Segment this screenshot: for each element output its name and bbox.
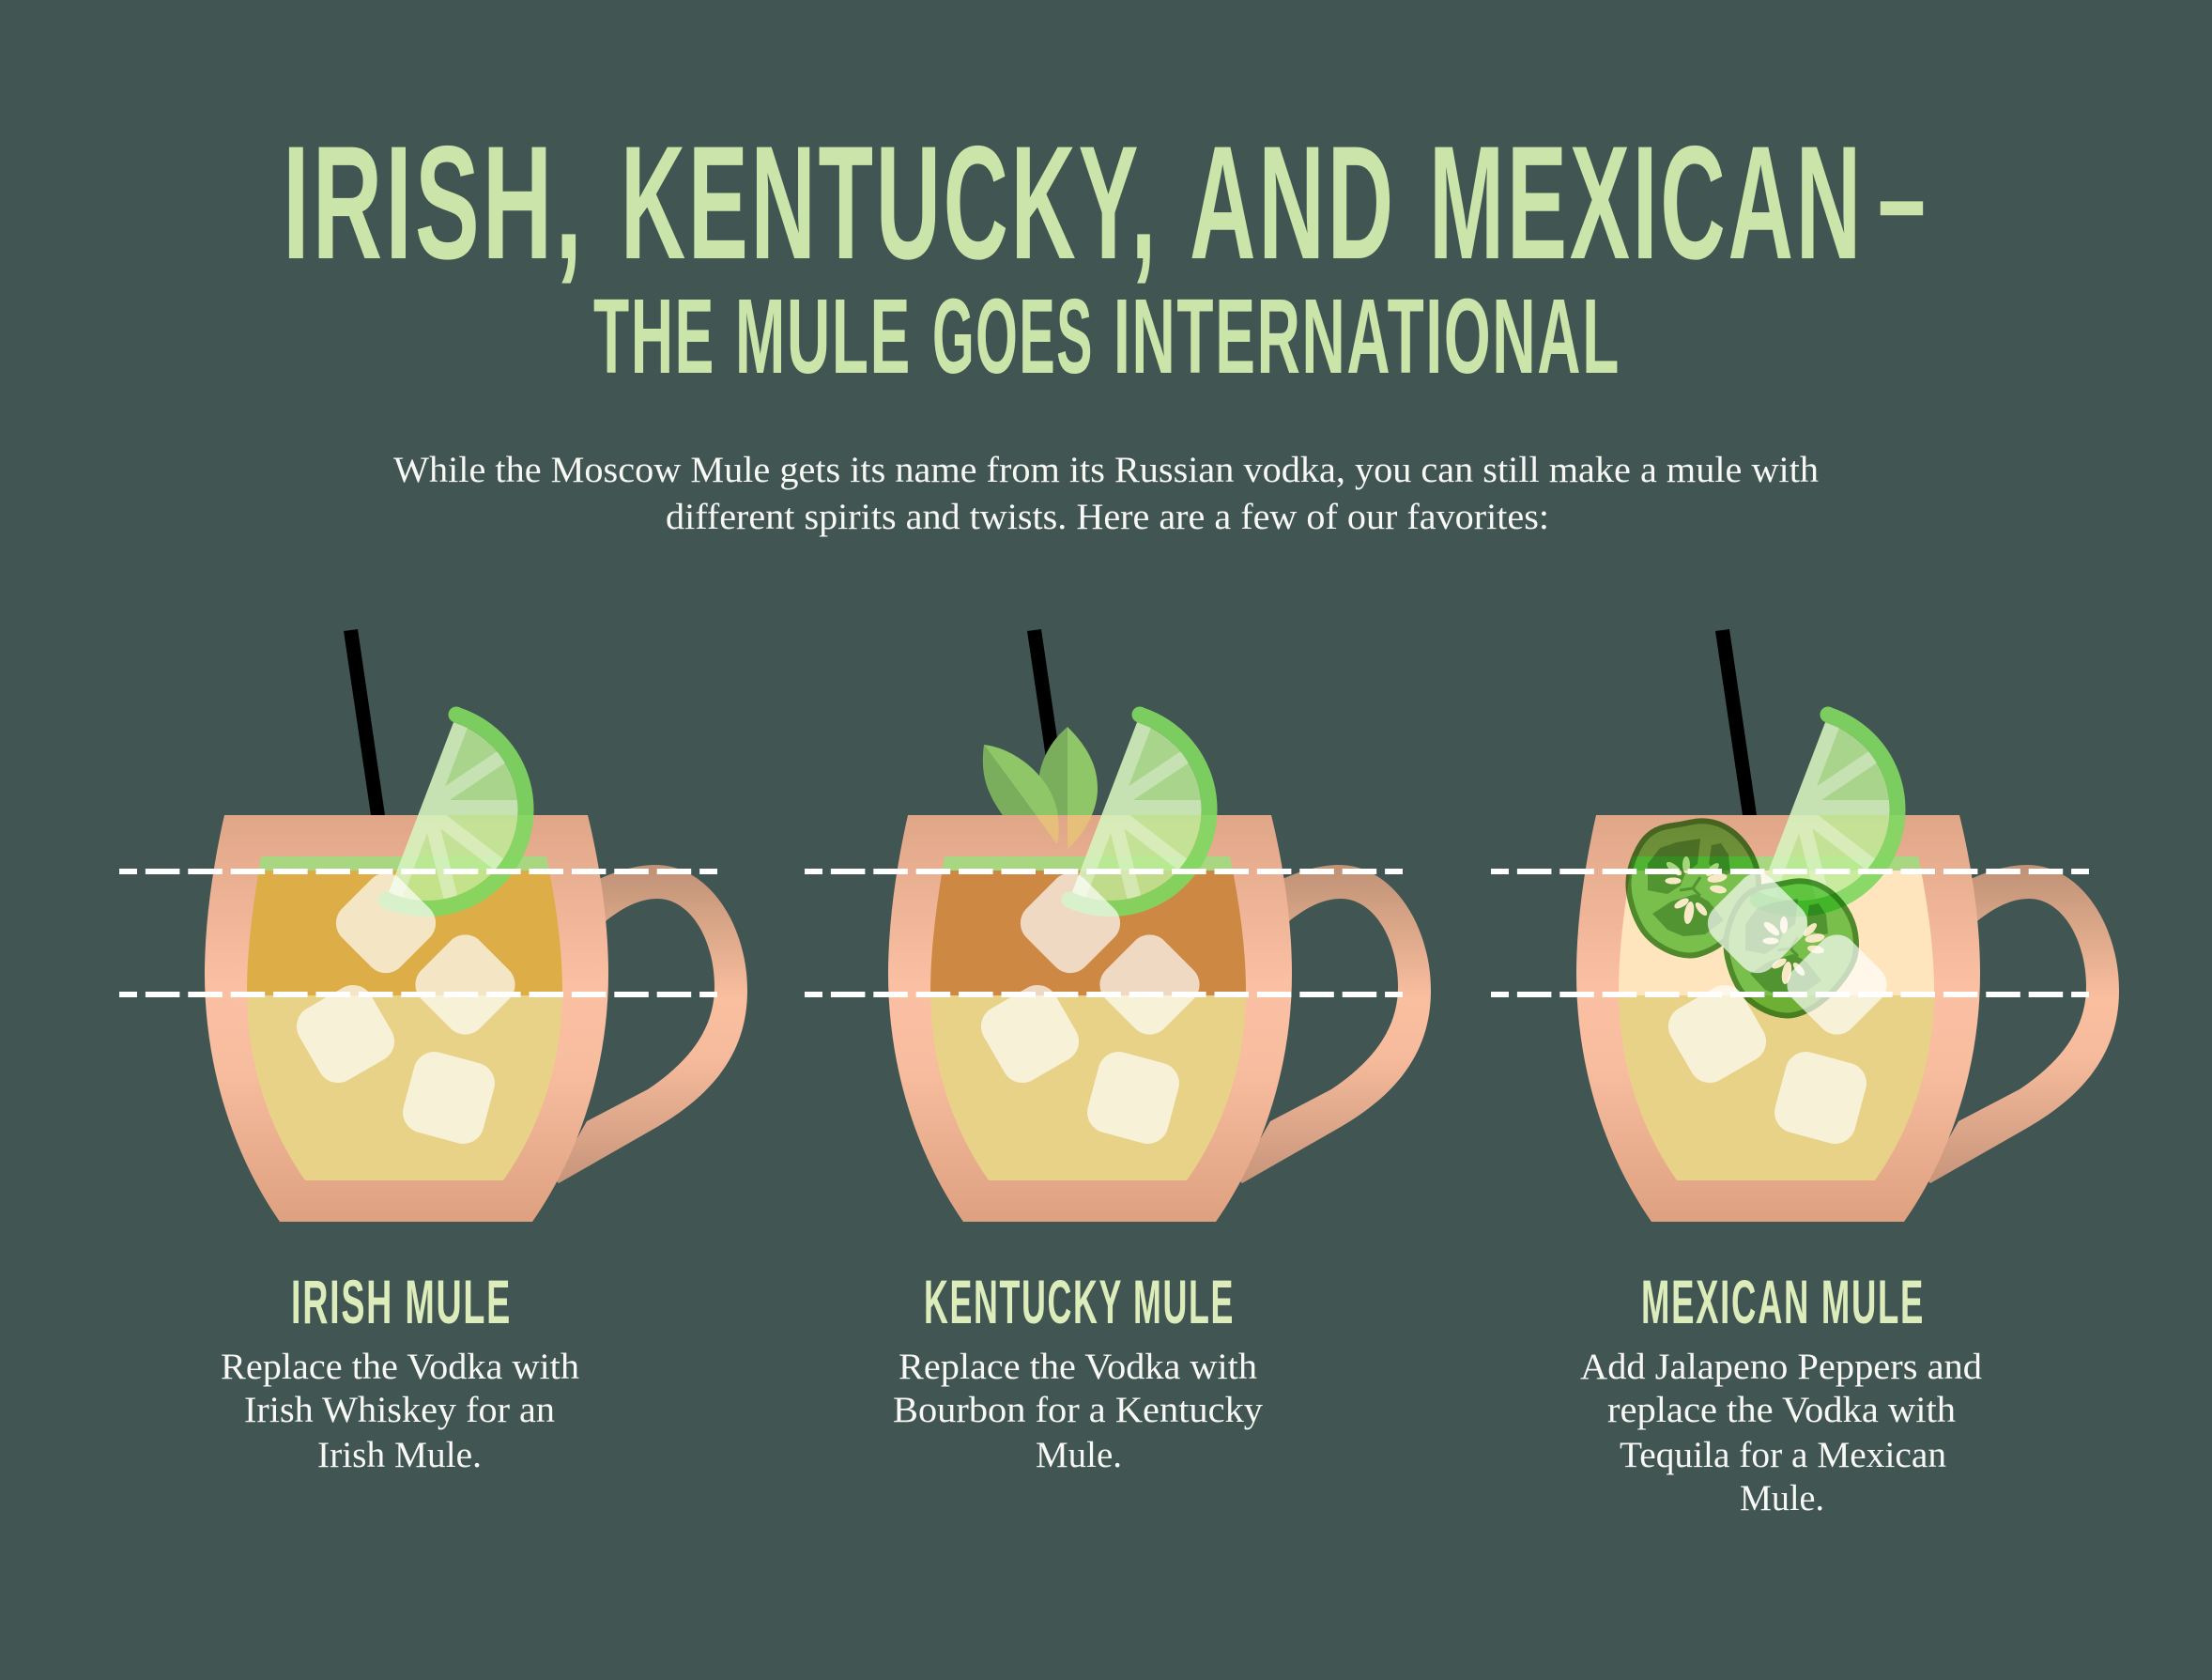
title: IRISH, bbox=[283, 113, 585, 293]
subtitle: GOES bbox=[932, 277, 1094, 395]
description: mexican mule: replace the Vodka with bbox=[1607, 1390, 1956, 1430]
panel: mexican mule mug bbox=[1491, 629, 2119, 1222]
heading: irish mule: IRISH MULE bbox=[291, 1267, 512, 1336]
straw bbox=[1715, 629, 1757, 815]
caption: kentucky mule bbox=[893, 1267, 1264, 1475]
ice cubes bbox=[1661, 865, 1896, 1148]
subtitle: INTERNATIONAL bbox=[1114, 277, 1621, 395]
ice cubes bbox=[289, 865, 524, 1148]
mug body bbox=[205, 815, 608, 1222]
mug handle bbox=[1926, 865, 2119, 1183]
title: – bbox=[1878, 118, 1926, 276]
subtitle: MULE bbox=[735, 277, 912, 395]
title bbox=[283, 113, 1926, 293]
heading: kentucky mule: KENTUCKY MULE bbox=[924, 1267, 1235, 1336]
caption: mexican mule bbox=[1580, 1267, 1983, 1518]
mug body bbox=[888, 815, 1292, 1222]
lime wedge bbox=[328, 705, 530, 928]
title: MEXICAN bbox=[1429, 113, 1864, 293]
mug handle bbox=[554, 865, 747, 1183]
jalapeno slices bbox=[1628, 821, 1856, 1016]
panel: kentucky mule mug bbox=[805, 629, 1431, 1222]
title: KENTUCKY, bbox=[621, 113, 1159, 293]
drink layers bbox=[1606, 856, 1944, 1183]
intro text: different spirits and twists. Here are a few of our favorites: bbox=[666, 497, 1549, 537]
description: irish mule: Replace the Vodka with bbox=[221, 1347, 579, 1387]
mug handle bbox=[1237, 865, 1431, 1183]
mug body bbox=[1576, 815, 1980, 1222]
lime wedge bbox=[1699, 705, 1902, 928]
description: mexican mule bbox=[1580, 1347, 1983, 1518]
drink layers bbox=[918, 856, 1256, 1183]
description: mexican mule: Tequila for a Mexican bbox=[1620, 1435, 1946, 1475]
mint leaves bbox=[983, 727, 1098, 849]
description: kentucky mule: Replace the Vodka with bbox=[899, 1347, 1257, 1387]
subtitle bbox=[593, 277, 1621, 395]
description: kentucky mule bbox=[893, 1347, 1264, 1475]
jalapeno seeds bbox=[1666, 873, 1825, 984]
heading: mexican mule: MEXICAN MULE bbox=[1641, 1267, 1925, 1336]
description: kentucky mule: Mule. bbox=[1036, 1435, 1122, 1475]
caption: irish mule bbox=[221, 1267, 579, 1475]
description: kentucky mule: Bourbon for a Kentucky bbox=[893, 1390, 1264, 1430]
ice cubes bbox=[974, 865, 1208, 1148]
description: irish mule: Irish Mule. bbox=[317, 1435, 482, 1475]
panel: irish mule mug bbox=[119, 629, 747, 1222]
straw bbox=[344, 629, 385, 815]
straw bbox=[1027, 629, 1068, 815]
description: irish mule: Irish Whiskey for an bbox=[244, 1390, 555, 1430]
description: mexican mule: Add Jalapeno Peppers and bbox=[1580, 1347, 1983, 1387]
drink layers bbox=[235, 856, 573, 1183]
subtitle: THE bbox=[593, 277, 715, 395]
dashed level lines bbox=[805, 871, 1403, 994]
intro text bbox=[393, 450, 1819, 537]
mint leaves over mug bbox=[1037, 815, 1092, 849]
lime wedge bbox=[1011, 705, 1214, 928]
dashed level lines bbox=[119, 871, 717, 994]
description: mexican mule: Mule. bbox=[1740, 1478, 1824, 1518]
description: irish mule bbox=[221, 1347, 579, 1475]
intro text: While the Moscow Mule gets its name from its Russian vodka, you can still make a mule with bbox=[393, 450, 1819, 490]
dashed level lines bbox=[1491, 871, 2089, 994]
title: AND bbox=[1190, 113, 1396, 293]
